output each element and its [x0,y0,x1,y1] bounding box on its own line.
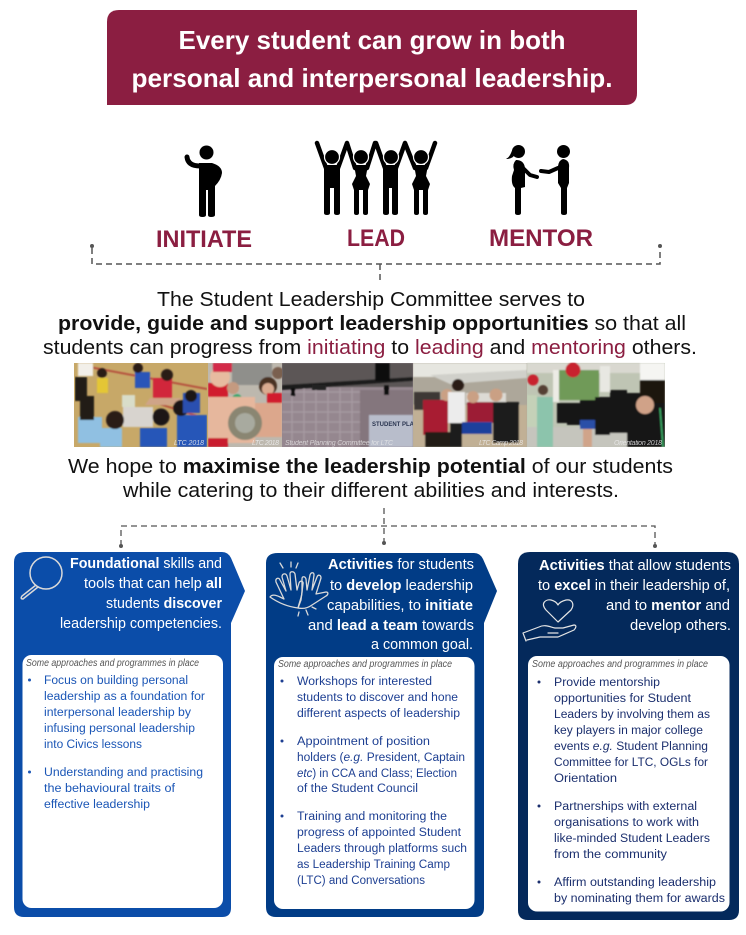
list: foundational programmes [26,658,205,811]
intro paragraph: students can progress from initiating to leading and mentoring others. [43,337,697,359]
panel heading: activities to develop: capabilities, to initiate [327,598,473,614]
photo: orientation group: Orientation 2018 [614,440,662,447]
icon: heart in open hand [523,600,576,641]
panel heading: foundational: leadership competencies. [60,616,222,632]
list: excel programmes: Some approaches and programmes in place [532,659,708,670]
list: excel programmes: Affirm outstanding leadership [554,877,716,889]
panel heading: foundational: students discover [106,596,222,612]
list: excel programmes [532,659,725,905]
photo: student close-up [208,363,284,447]
list: develop programmes: Appointment of position [297,736,430,748]
list: develop programmes: etc) in CCA and Class; Election [297,768,457,780]
list: excel programmes: by nominating them for awards [554,893,725,905]
list: foundational programmes: Focus on building personal [44,675,188,687]
title banner: personal and interpersonal leadership. [132,63,612,93]
list: foundational programmes: into Civics lessons [44,739,142,751]
branching connector [119,508,657,548]
list: develop programmes: of the Student Council [297,783,418,795]
photo: students at table [413,363,527,447]
photo: presentation screen: STUDENT PLAN [372,422,418,428]
title banner [107,10,637,105]
panel heading: activities to excel: Activities that allow students [539,558,731,574]
list: develop programmes: students to discover and hone [297,692,458,704]
list: excel programmes: like-minded Student Leaders [554,833,710,845]
list: foundational programmes: infusing personal leadership [44,723,195,735]
photo: group on gym floor [74,363,208,447]
photo: orientation group [527,362,665,447]
icon: mentor two people shaking hands [506,145,570,215]
list: excel programmes: Committee for LTC, OGLs for [554,757,708,769]
list: foundational programmes: the behavioural traits of [44,783,176,795]
photo: students at table: LTC Camp 2018 [479,440,523,447]
label: initiate: INITIATE [156,226,252,253]
list: develop programmes: Leaders through platforms such [297,843,467,855]
list: excel programmes: Orientation [554,773,617,785]
list: foundational programmes: Understanding and practising [44,767,203,779]
list: develop programmes [278,659,467,887]
icon: initiate person raising hand [187,146,222,217]
list: foundational programmes: effective leadership [44,799,150,811]
list: excel programmes: organisations to work with [554,817,699,829]
goal paragraph: while catering to their different abilities and interests. [122,480,619,502]
panel heading: activities to develop: a common goal. [371,637,473,653]
label: lead: LEAD [347,225,405,252]
list: excel programmes: Leaders by involving them as [554,709,710,721]
panel heading: activities to develop: to develop leadership [330,578,473,594]
list: excel programmes: opportunities for Student [554,693,692,705]
icon: high five hands [270,562,328,616]
list: excel programmes: events e.g. Student Planning [554,741,708,753]
list: develop programmes: Workshops for interested [297,676,432,688]
list: excel programmes: Provide mentorship [554,677,660,689]
photo: presentation screen: Student Planning Committee for LTC [285,440,394,447]
intro paragraph: The Student Leadership Committee serves to [157,289,585,311]
list: develop programmes: Training and monitoring the [297,811,447,823]
list: foundational programmes: Some approaches and programmes in place [26,658,199,669]
panel: activities to excel [518,552,739,920]
title banner: Every student can grow in both [178,25,566,55]
icon: magnifying glass [21,557,62,599]
panel: activities to develop [266,553,497,917]
panel heading: activities to develop: and lead a team towards [308,618,474,634]
panel heading: activities to excel: and to mentor and [606,598,730,614]
list: foundational programmes: leadership as a foundation for [44,691,205,703]
list: develop programmes: as Leadership Training Camp [297,859,450,871]
list: develop programmes: different aspects of leadership [297,708,460,720]
panel heading: foundational [60,556,222,632]
photo: student close-up: LTC 2018 [252,440,279,447]
photo: group on gym floor: LTC 2018 [174,440,204,447]
list: develop programmes: holders (e.g. President, Captain [297,752,465,764]
photo strip [74,362,665,447]
bracket connector [90,244,662,281]
goal paragraph: We hope to maximise the leadership potential of our students [68,456,673,478]
list: develop programmes: progress of appointed Student [297,827,462,839]
panel heading: activities to develop: Activities for students [328,557,474,573]
list: foundational programmes: interpersonal leadership by [44,707,191,719]
icon: four people holding hands up [317,143,435,215]
list: develop programmes: Some approaches and programmes in place [278,659,452,670]
panel heading: activities to excel [538,558,731,634]
list: develop programmes: (LTC) and Conversations [297,875,425,887]
panel heading: activities to excel: to excel in their leadership of, [538,578,730,594]
intro paragraph [43,289,697,359]
intro paragraph: provide, guide and support leadership opportunities so that all [58,313,686,335]
label: mentor: MENTOR [489,225,593,252]
list: excel programmes: Partnerships with external [554,801,697,813]
panel heading: foundational: Foundational skills and [70,556,222,572]
panel heading: activities to excel: develop others. [630,618,731,634]
panel heading: activities to develop [308,557,474,653]
list: excel programmes: from the community [554,849,667,861]
panel: foundational [14,552,245,917]
list: excel programmes: key players in major college [554,725,703,737]
photo: presentation screen [282,363,418,447]
goal paragraph [68,456,673,502]
panel heading: foundational: tools that can help all [84,576,222,592]
